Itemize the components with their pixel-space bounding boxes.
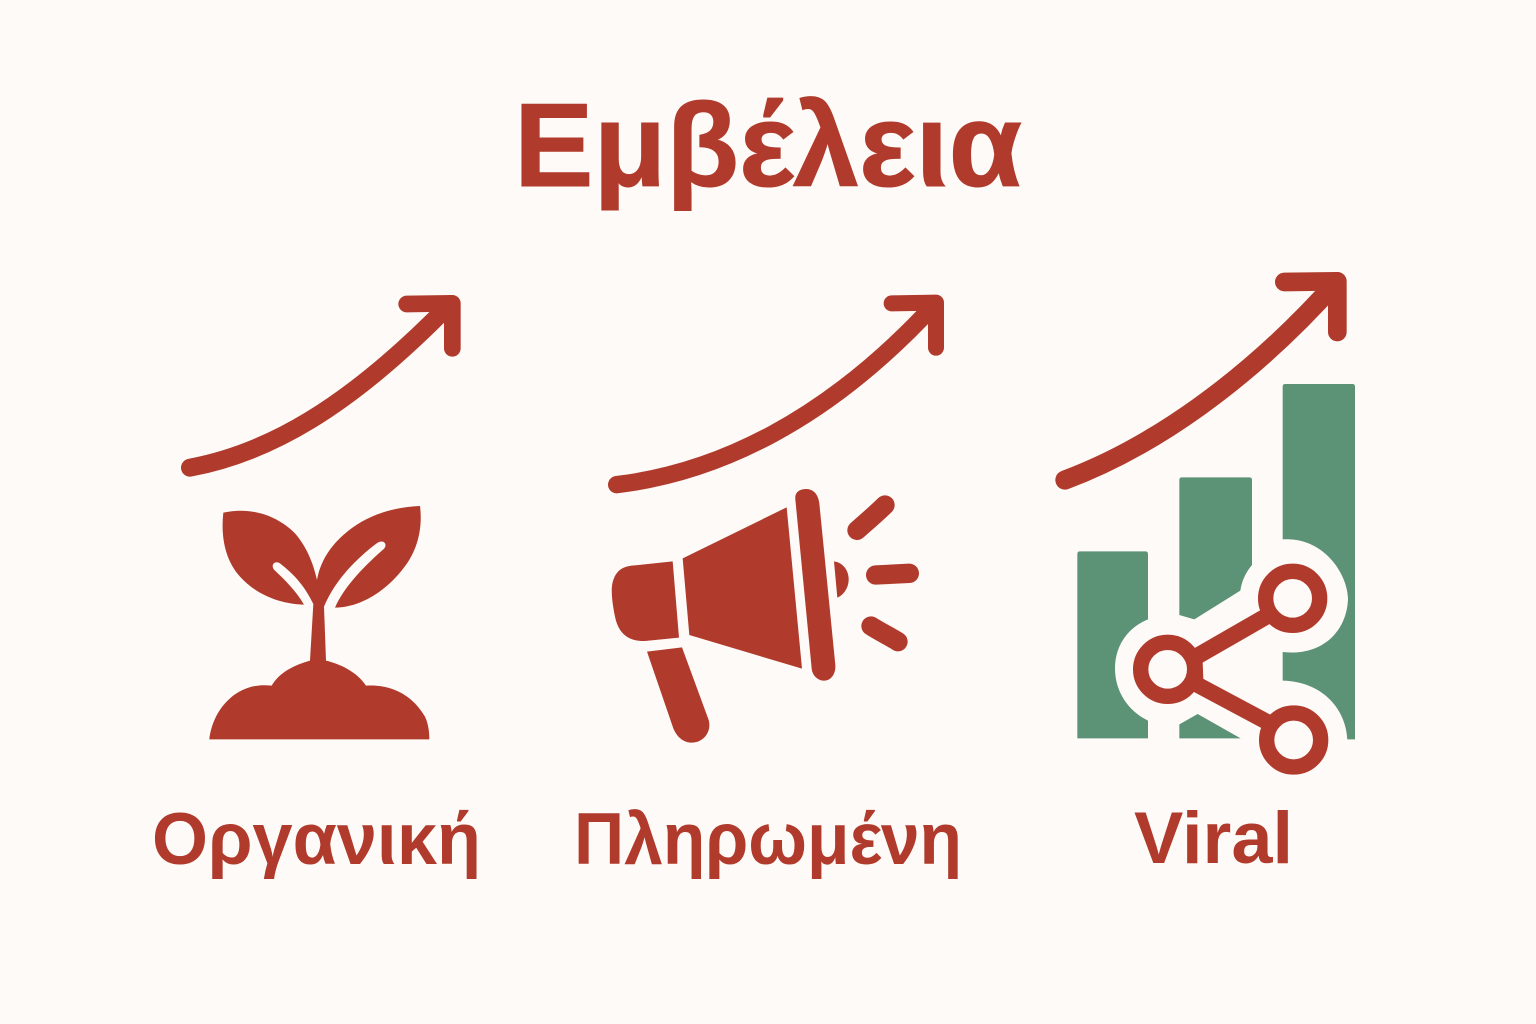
title: Εμβέλεια [514,79,1022,212]
green bar 2 [1179,477,1252,738]
megaphone handle [647,647,709,743]
megaphone cone [683,507,802,669]
arrow: organic growth [190,303,452,468]
arrow: viral growth [1065,281,1337,480]
label: paid: Πληρωμένη [574,799,962,880]
green bar 3 [1283,384,1355,739]
icon: bar chart with share network [1077,384,1355,767]
share network [1141,571,1321,767]
arrow: paid growth [617,303,936,485]
sound dome [834,561,849,598]
green bar 1 [1077,551,1148,738]
label: organic: Οργανική [152,799,481,880]
megaphone handle grip [612,561,679,641]
icon: megaphone [612,489,909,743]
label: viral: Viral [1134,798,1293,879]
sound wave lines [857,505,909,642]
icon: sprout [209,506,429,739]
megaphone rim [795,489,835,681]
